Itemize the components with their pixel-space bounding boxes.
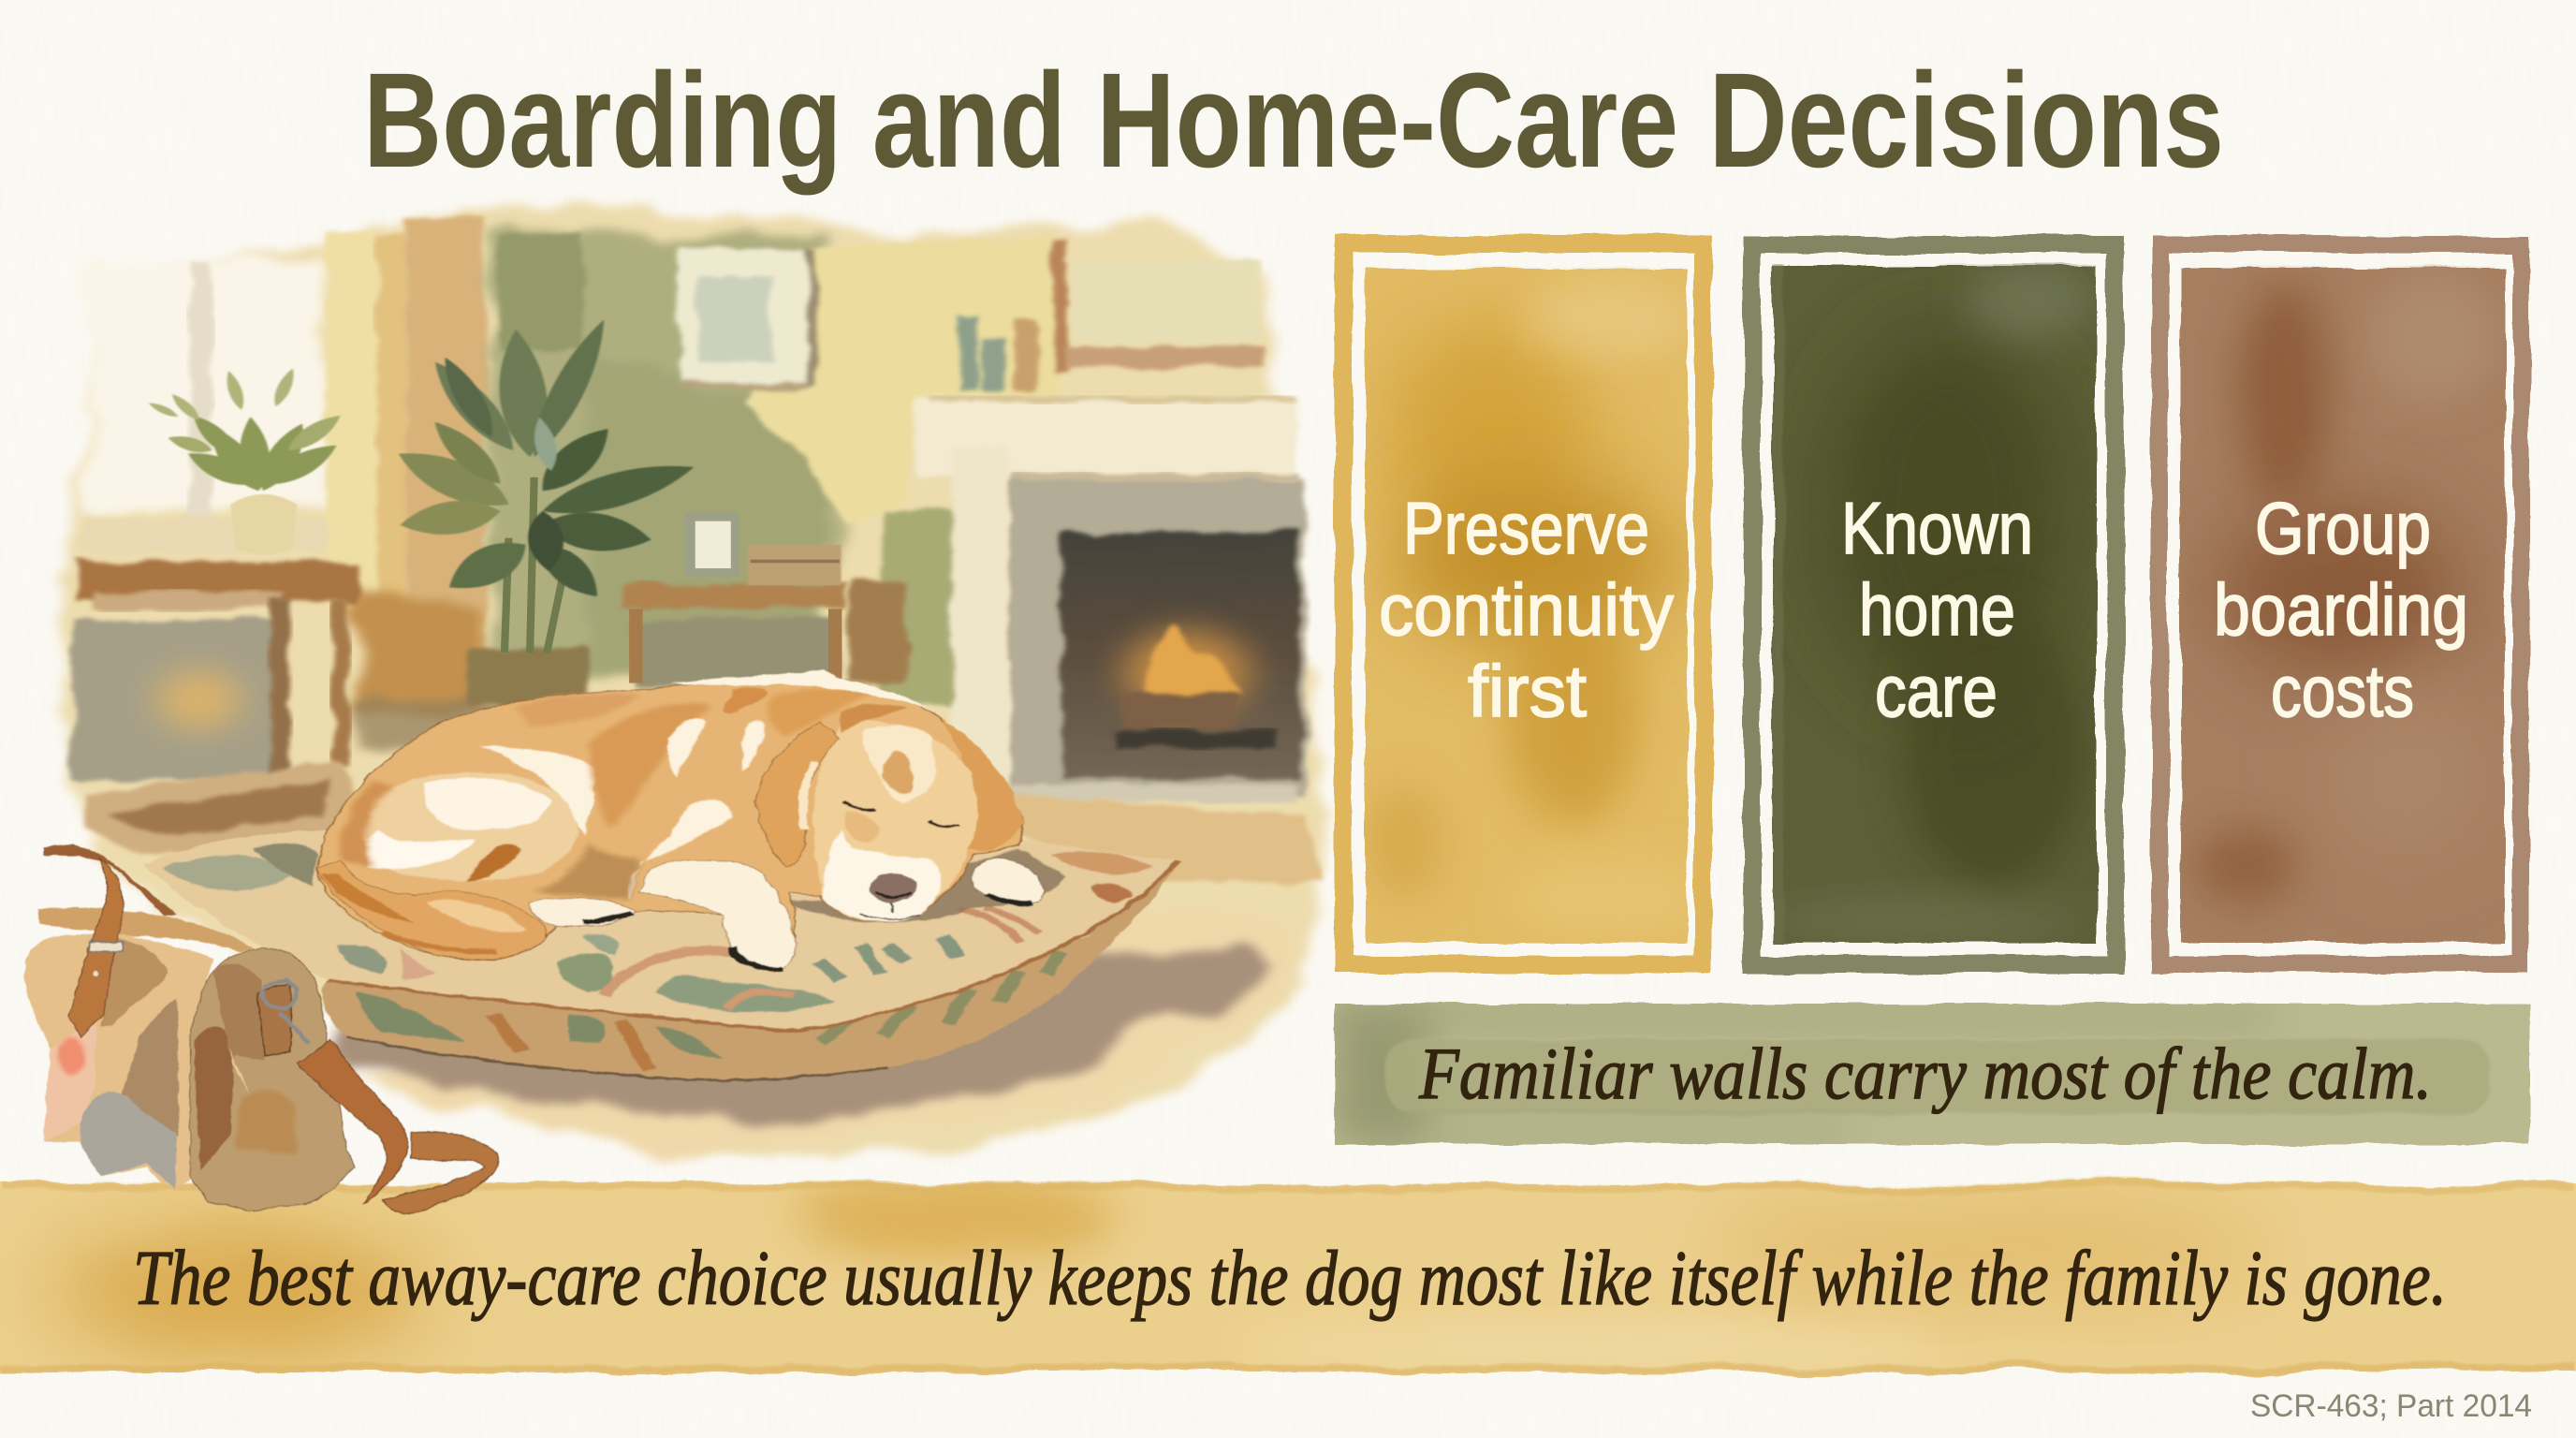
card text: care bbox=[1875, 650, 1998, 732]
golden retriever bbox=[316, 669, 1046, 972]
mirror frame and mantel decor bbox=[959, 242, 1262, 394]
panel: option cards bbox=[1343, 244, 2521, 964]
banner text: Familiar walls carry most of the calm. bbox=[1418, 1033, 2432, 1114]
large potted plant bbox=[388, 315, 701, 707]
cushion top bbox=[144, 830, 1178, 1031]
panel: bottom takeaway banner bbox=[0, 1175, 2576, 1372]
front leg and paw bbox=[640, 859, 795, 971]
card text bbox=[2214, 487, 2468, 732]
bag top bar bbox=[38, 907, 254, 952]
fireplace bbox=[915, 396, 1306, 801]
bag back panel bbox=[25, 934, 213, 1189]
card text: Group bbox=[2255, 487, 2431, 569]
card text: Preserve bbox=[1403, 487, 1649, 569]
tail bbox=[316, 861, 548, 960]
panel: familiar walls banner bbox=[1335, 1004, 2529, 1144]
dog body bbox=[316, 674, 1023, 972]
floor wash and rug bbox=[339, 794, 1323, 1159]
card text: home bbox=[1859, 568, 2015, 651]
source note: SCR-463; Part 2014 bbox=[2250, 1388, 2532, 1424]
card text: Known bbox=[1841, 487, 2033, 569]
rear paw bbox=[527, 898, 635, 927]
dog head bbox=[755, 704, 1022, 922]
cushion lower band bbox=[323, 861, 1178, 1080]
cushion pattern bbox=[163, 844, 1153, 1012]
cushion bbox=[144, 830, 1178, 1080]
card text: continuity bbox=[1379, 568, 1674, 651]
bag handle bbox=[43, 844, 177, 1037]
right paw bbox=[972, 858, 1046, 904]
card text: costs bbox=[2271, 650, 2414, 732]
leash clip and strap bbox=[257, 980, 499, 1213]
left console table bbox=[72, 562, 373, 855]
side table with books and photo bbox=[623, 512, 907, 686]
illustration: sleeping dog in living room bbox=[25, 210, 1323, 1213]
card text bbox=[1841, 487, 2033, 732]
card text bbox=[1379, 487, 1674, 732]
fur markings bbox=[341, 669, 928, 899]
travel bag and leash bbox=[25, 844, 499, 1213]
picture frame on wall bbox=[679, 248, 815, 389]
bag front panel bbox=[190, 948, 354, 1211]
room background wash bbox=[59, 210, 1316, 1159]
room background bbox=[59, 210, 1323, 1159]
small vase plant bbox=[146, 367, 347, 555]
card: preserve continuity first bbox=[1343, 244, 1713, 964]
card text: first bbox=[1468, 650, 1587, 732]
card text: boarding bbox=[2214, 568, 2468, 651]
card: known home care bbox=[1752, 244, 2115, 964]
card: group boarding costs bbox=[2159, 244, 2521, 964]
